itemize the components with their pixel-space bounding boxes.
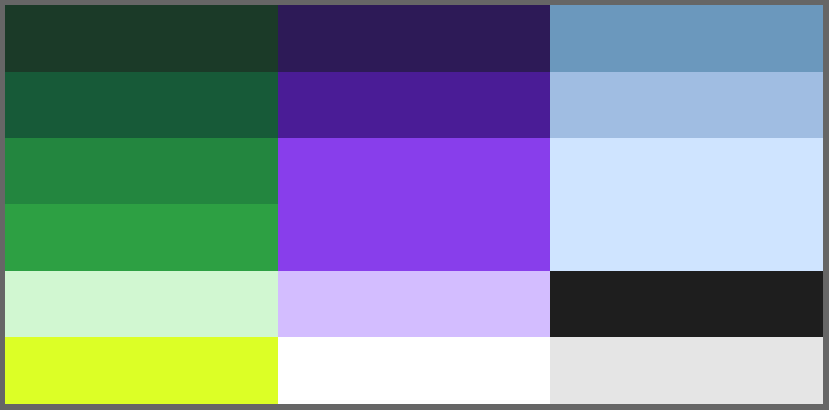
- swatch: medium green: [5, 138, 278, 204]
- swatch: deep green: [5, 72, 278, 138]
- swatch: soft blue: [550, 72, 823, 138]
- swatch: near black: [550, 271, 823, 337]
- swatch: bright violet: [278, 138, 550, 271]
- swatch: steel blue: [550, 5, 823, 72]
- swatch: deep violet: [278, 72, 550, 138]
- swatch: pale blue: [550, 138, 823, 271]
- swatch: light grey: [550, 337, 823, 404]
- swatch: white: [278, 337, 550, 404]
- swatch: dark forest green: [5, 5, 278, 72]
- swatch: pale lilac: [278, 271, 550, 337]
- swatch: bright green: [5, 204, 278, 271]
- swatch: dark purple: [278, 5, 550, 72]
- swatch: pale mint: [5, 271, 278, 337]
- swatch: neon yellow-green: [5, 337, 278, 404]
